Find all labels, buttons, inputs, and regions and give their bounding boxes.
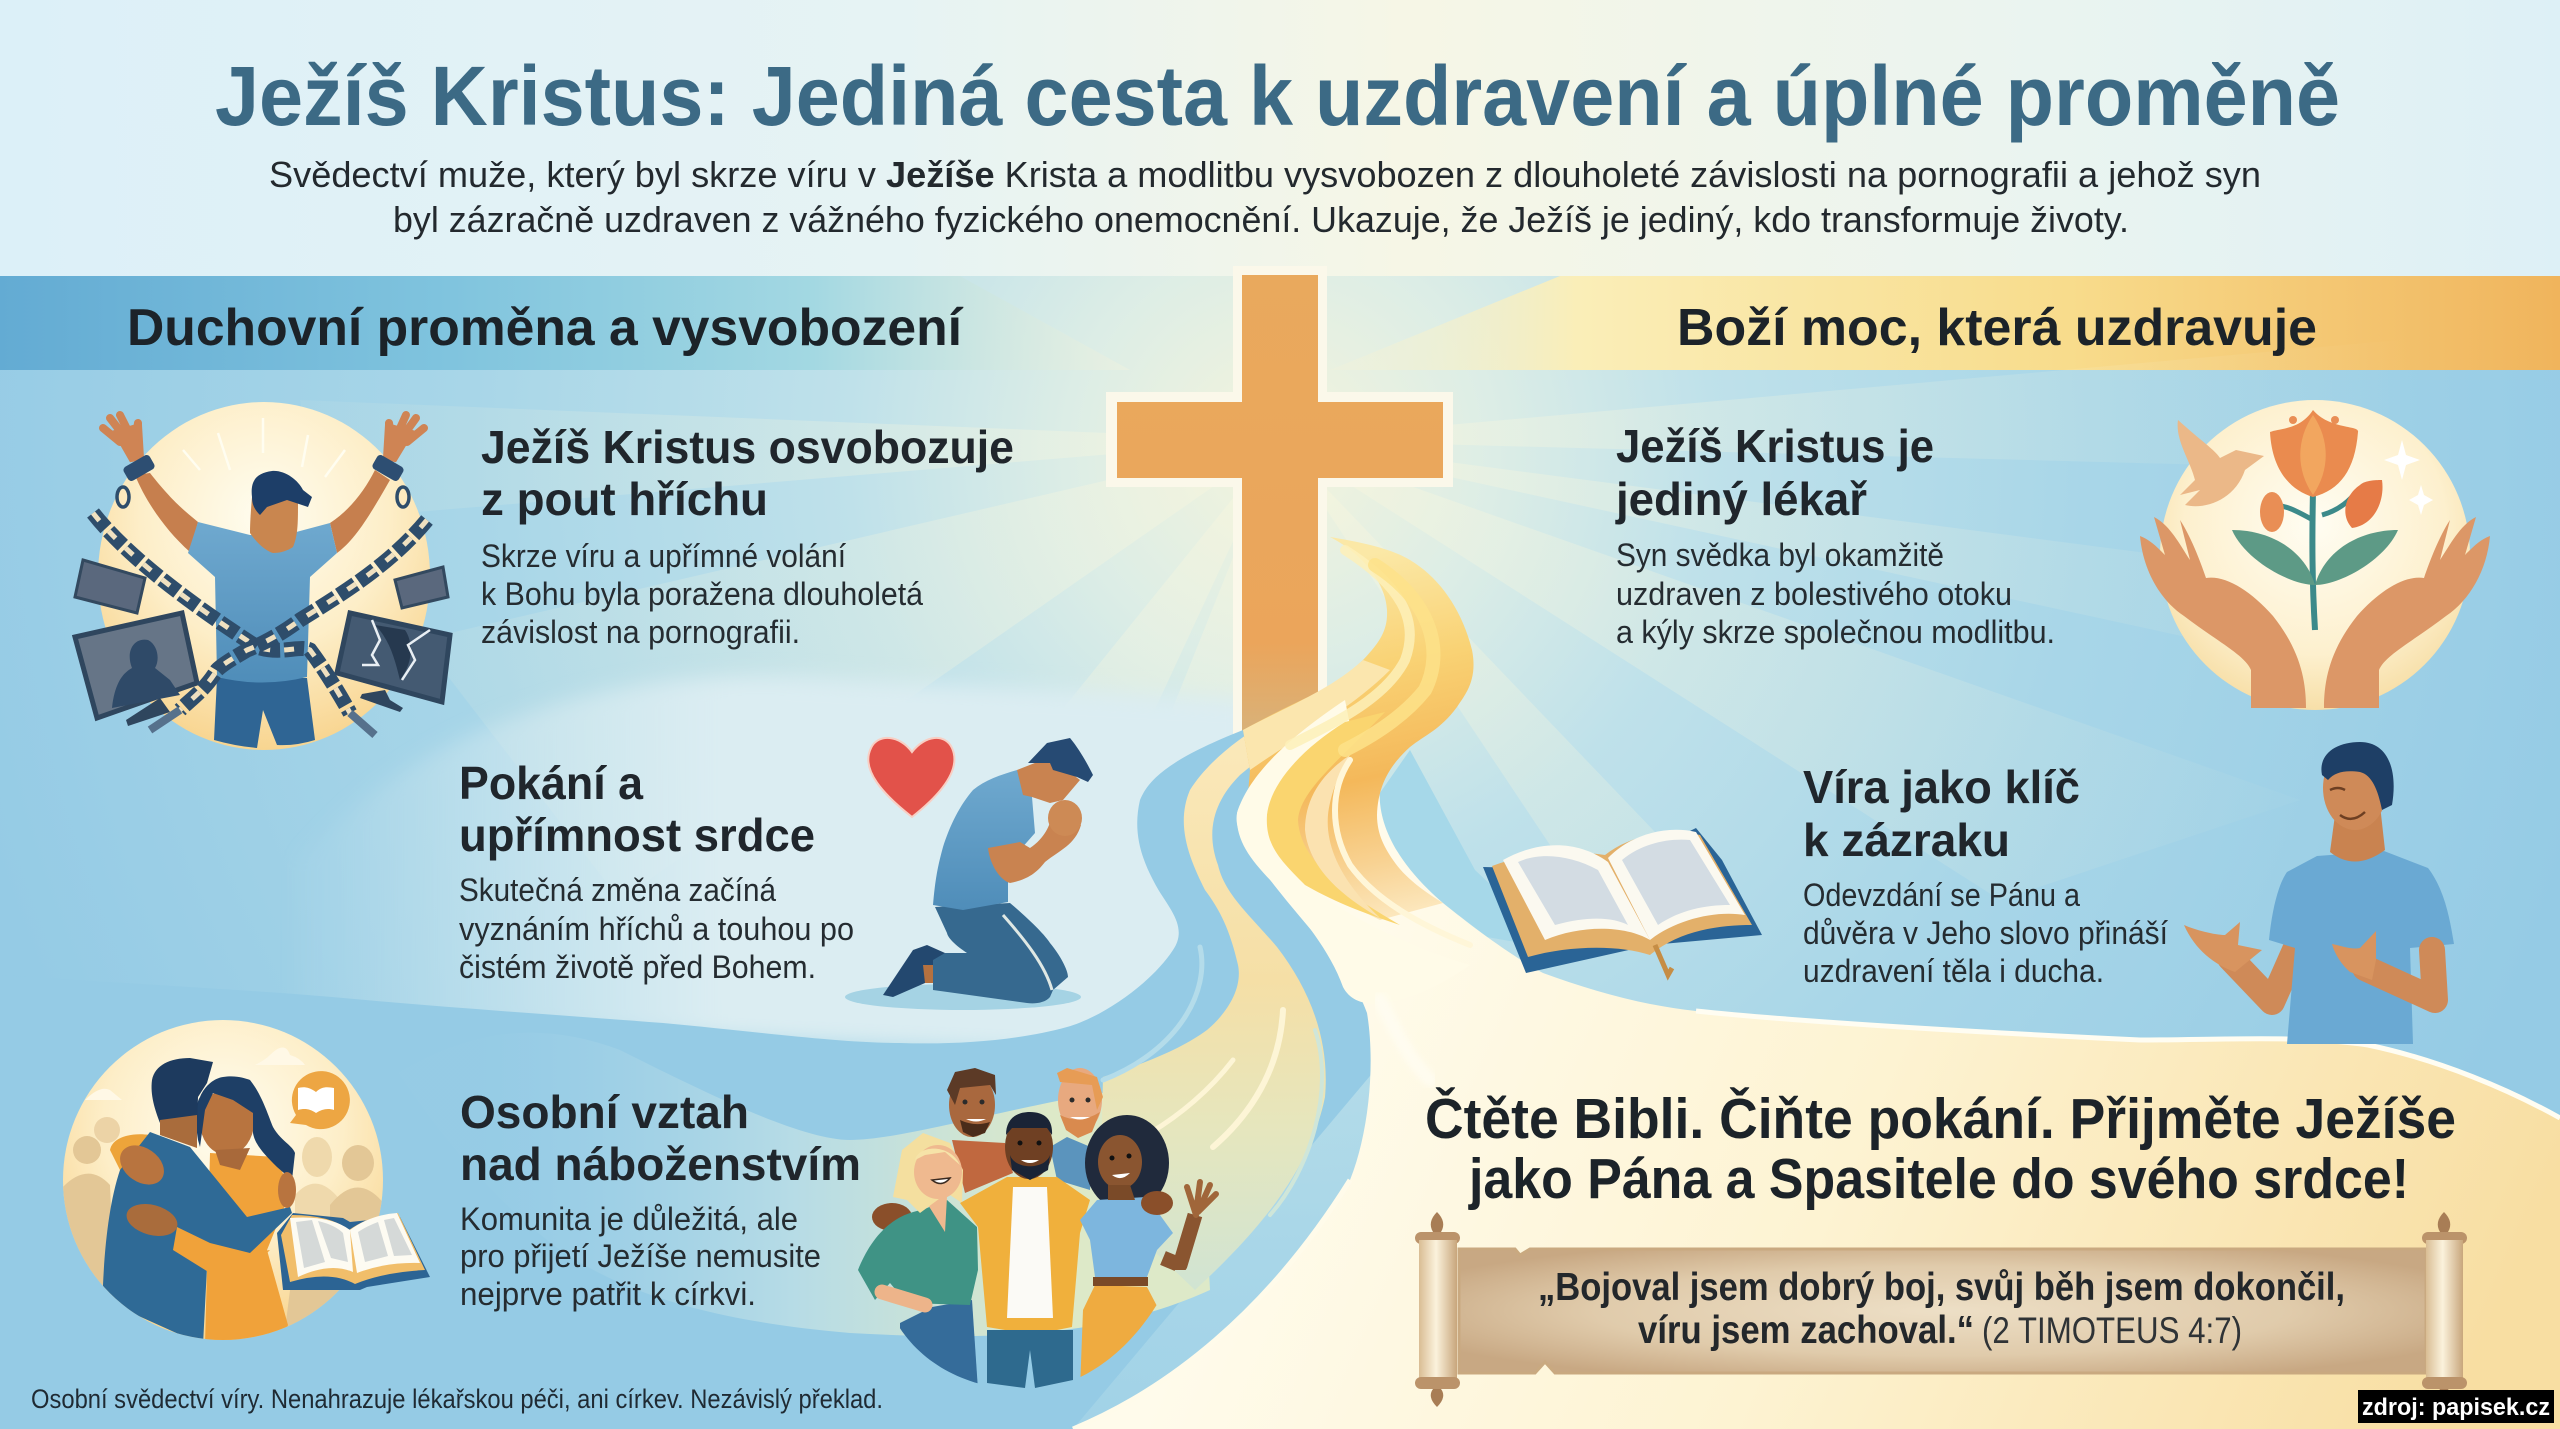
- scroll with quote: (2 TIMOTEUS 4:7): [1982, 1310, 2242, 1351]
- section band: right: [1330, 276, 2560, 370]
- pants: [214, 678, 315, 748]
- icon: kneeling man praying: [845, 738, 1093, 1010]
- text block: Víra jako klíč k zázraku: důvěra v Jeho slovo přináší: [1803, 915, 2168, 951]
- clouds: [255, 1048, 305, 1065]
- river of light: [0, 537, 2560, 1429]
- bearded man: [960, 1112, 1090, 1388]
- text block: Osobní vztah nad náboženstvím: nad náboženstvím: [460, 1138, 861, 1190]
- torso: [933, 770, 1035, 910]
- icon: group of people: [858, 1068, 1216, 1390]
- arms: [135, 473, 198, 552]
- head from behind: [250, 480, 298, 553]
- text block: Osobní vztah nad náboženstvím: Komunita je důležitá, ale: [460, 1201, 798, 1237]
- curly woman hair: [1085, 1115, 1169, 1211]
- blue flood under the stream: [0, 695, 1375, 1429]
- white central flow: [1237, 700, 1470, 1004]
- right roller: [2422, 1212, 2467, 1407]
- section band: left: [0, 276, 1130, 370]
- icon: open Bible: [1483, 828, 1762, 975]
- flame highlights: [1290, 550, 1470, 1080]
- subtitle: [269, 154, 2261, 240]
- text block: Osobní vztah nad náboženstvím: pro přijetí Ježíše nemusite: [460, 1238, 821, 1274]
- tulip: [2270, 410, 2358, 497]
- golden flame: [1243, 537, 1474, 920]
- right hand: [2324, 517, 2490, 708]
- open book: [277, 1213, 430, 1290]
- text block: Pokání a upřímnost srdce: vyznáním hříchů a touhou po: [459, 911, 854, 947]
- woman face: [202, 1093, 253, 1152]
- hands: [1048, 800, 1082, 836]
- yellow inner flow: [1267, 712, 1400, 925]
- heading: left section: Duchovní proměna a vysvobození: [127, 299, 964, 357]
- left hand: [2140, 517, 2306, 708]
- text block: Víra jako klíč k zázraku: uzdravení těla i ducha.: [1803, 953, 2104, 989]
- speech bubble with book: [290, 1071, 350, 1129]
- legs: [933, 903, 1068, 1003]
- text block: Ježíš Kristus je jediný lékař: jediný lékař: [1615, 473, 1867, 525]
- face: [1017, 757, 1080, 803]
- text block: Ježíš Kristus osvobozuje: z pout hříchu: [481, 473, 768, 525]
- call to action: [1425, 1086, 2456, 1211]
- text block: Ježíš Kristus osvobozuje: Ježíš Kristus osvobozuje: [481, 421, 1014, 473]
- man body: [103, 1132, 292, 1345]
- text block: Ježíš Kristus osvobozuje: Skrze víru a upřímné volání: [481, 538, 846, 574]
- sparkles: [2384, 440, 2420, 480]
- sleeve over man's shoulder: [110, 1134, 148, 1170]
- text block: Ježíš Kristus je jediný lékař: a kýly skrze společnou modlitbu.: [1616, 614, 2055, 650]
- woman hair: [196, 1076, 295, 1180]
- man hand: [278, 1172, 296, 1208]
- torso shirt: [188, 522, 337, 682]
- subtitle: byl zázračně uzdraven z vážného fyzického onemocnění. Ukazuje, že Ježíš je jediný, kdo transformuje životy.: [393, 199, 2129, 240]
- text block: Ježíš Kristus osvobozuje: závislost na pornografii.: [481, 614, 800, 650]
- cuffs: [122, 454, 156, 482]
- right hand: [2332, 931, 2376, 980]
- text block: Osobní vztah nad náboženstvím: nejprve patřit k církvi.: [460, 1276, 756, 1312]
- silhouettes: [60, 1117, 385, 1345]
- dove: [2178, 420, 2264, 506]
- scroll with quote: [1415, 1212, 2467, 1407]
- monitors: [75, 560, 450, 726]
- head: [2323, 746, 2387, 830]
- hands: [103, 415, 424, 460]
- text block: Ježíš Kristus osvobozuje: k Bohu byla poražena dlouholetá: [481, 576, 923, 612]
- call to action: jako Pána a Spasitele do svého srdce!: [1468, 1147, 2409, 1211]
- neck: [2330, 805, 2385, 862]
- left roller: [1415, 1212, 1460, 1407]
- light rays from cross: [300, 340, 2400, 1000]
- text block: Ježíš Kristus je jediný lékař: [1615, 420, 2055, 650]
- text block: Víra jako klíč k zázraku: k zázraku: [1803, 814, 2010, 866]
- right arm: [2365, 950, 2435, 1000]
- left hand: [2184, 922, 2262, 972]
- man neck: [160, 1115, 197, 1148]
- text block: Víra jako klíč k zázraku: Odevzdání se Pánu a: [1803, 877, 2080, 913]
- subtitle: Svědectví muže, který byl skrze víru v Ježíše Krista a modlitbu vysvobozen z dlouholeté závislosti na pornografii a jehož syn: [269, 154, 2261, 195]
- pale upper strip: [1243, 660, 1390, 770]
- cream region edge highlight: [1696, 1011, 2560, 1118]
- thin streaks: [1103, 947, 1322, 1215]
- curly woman: [1080, 1135, 1216, 1390]
- shoes: [883, 945, 945, 997]
- hair: [2321, 742, 2394, 810]
- icon: freed man breaking chains: [75, 402, 450, 750]
- text block: Pokání a upřímnost srdce: upřímnost srdce: [459, 809, 815, 861]
- source watermark: zdroj: papisek.cz: [2362, 1394, 2550, 1421]
- peach inner flow: [1305, 755, 1380, 918]
- woman hands: [120, 1145, 164, 1185]
- icon: hands holding flower and dove: [2140, 400, 2490, 710]
- text block: Osobní vztah nad náboženstvím: Osobní vztah: [460, 1086, 749, 1138]
- heading: right section: Boží moc, která uzdravuje: [1677, 299, 2317, 357]
- blue patch right of the stream: [1375, 750, 1560, 950]
- hair: [1028, 738, 1093, 782]
- text block: Osobní vztah nad náboženstvím: [460, 1086, 861, 1312]
- text block: Pokání a upřímnost srdce: Pokání a: [459, 757, 643, 809]
- text block: Víra jako klíč k zázraku: [1803, 761, 2168, 989]
- scroll body: [1459, 1249, 2426, 1373]
- cream region: [1073, 717, 2560, 1429]
- icon: heart: [868, 738, 954, 817]
- icon: embrace in circle: [60, 1020, 430, 1345]
- header background: [0, 0, 2560, 276]
- text block: Pokání a upřímnost srdce: [459, 757, 854, 985]
- left arm: [2230, 950, 2295, 1002]
- cross: [1106, 266, 1453, 735]
- woman: [205, 1153, 290, 1345]
- man hair: [152, 1058, 213, 1127]
- icon: man with open hands: [2184, 742, 2454, 1044]
- text block: Ježíš Kristus je jediný lékař: Syn svědka byl okamžitě: [1616, 537, 1944, 573]
- quote text: „Bojoval jsem dobrý boj, svůj běh jsem dokončil,: [1538, 1266, 2345, 1309]
- call to action: Čtěte Bibli. Čiňte pokání. Přijměte Ježíše: [1425, 1086, 2456, 1151]
- light swoosh behind group: [398, 1033, 1210, 1336]
- cream boundary highlight over blue: [1073, 1180, 1350, 1429]
- text block: Ježíš Kristus je jediný lékař: uzdraven z bolestivého otoku: [1616, 576, 2012, 612]
- shirt: [2269, 851, 2454, 1044]
- text block: Pokání a upřímnost srdce: čistém životě před Bohem.: [459, 949, 816, 985]
- light wave behind kneeling man: [300, 676, 1250, 1060]
- pale yellow strand: [1100, 690, 1340, 1290]
- back right man: [1050, 1068, 1103, 1190]
- text block: Ježíš Kristus osvobozuje: [481, 421, 1014, 650]
- woman lower arm: [173, 1227, 270, 1273]
- text block: Ježíš Kristus je jediný lékař: Ježíš Kristus je: [1616, 420, 1934, 472]
- title: Ježíš Kristus: Jediná cesta k uzdravení a úplné proměně: [215, 49, 2340, 143]
- blonde woman: [858, 1133, 978, 1390]
- chains: [93, 487, 427, 735]
- stem and leaves: [2312, 490, 2315, 630]
- back left man: [947, 1068, 1013, 1193]
- text block: Víra jako klíč k zázraku: Víra jako klíč: [1803, 761, 2080, 813]
- footer note: Osobní svědectví víry. Nenahrazuje lékařskou péči, ani církev. Nezávislý překlad.: [31, 1384, 883, 1414]
- scroll with quote: víru jsem zachoval.“: [1638, 1309, 1974, 1352]
- text block: Pokání a upřímnost srdce: Skutečná změna začíná: [459, 872, 776, 908]
- blonde woman hand on shoulder: [872, 1203, 912, 1231]
- arm: [988, 815, 1081, 883]
